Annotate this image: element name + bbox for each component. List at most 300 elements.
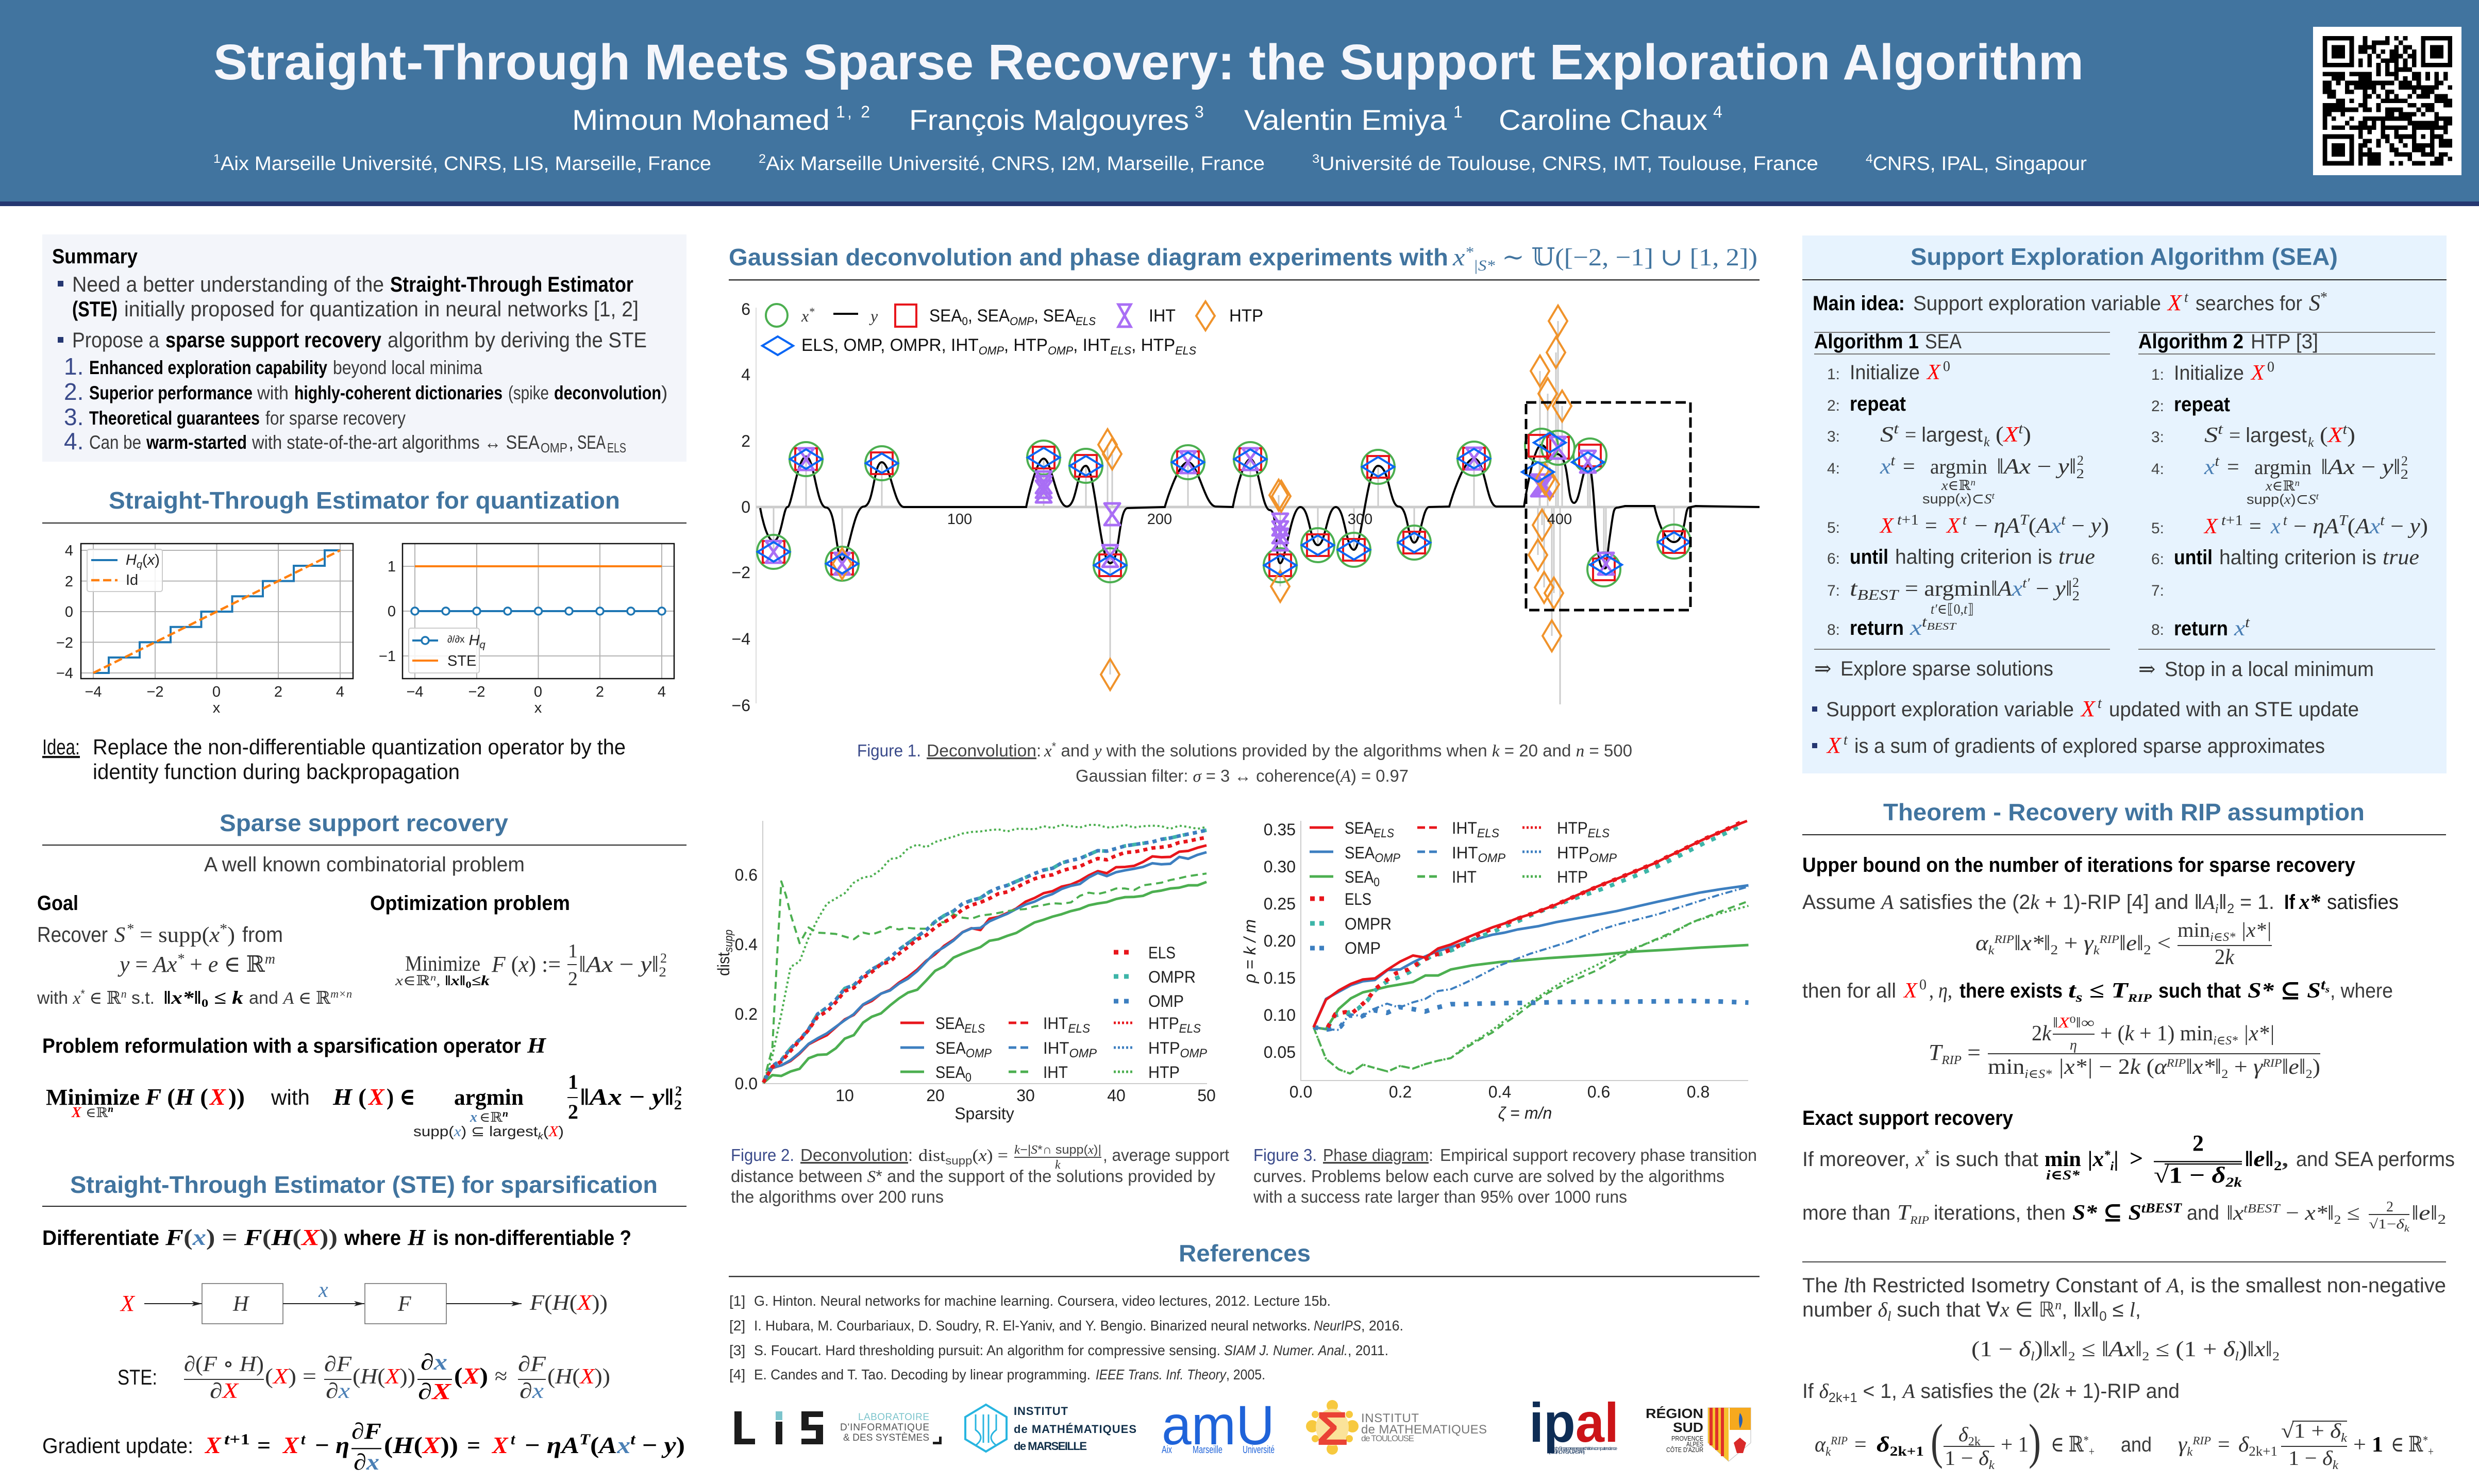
- gradient update formula: t: [301, 1431, 306, 1448]
- summary numbered list: Enhanced exploration capability: [89, 357, 327, 378]
- goal block: n: [121, 987, 127, 1000]
- algorithm 2: HTP: Stop in a local minimum: [2165, 658, 2374, 681]
- logo: Region Sud: SUD: [1673, 1420, 1703, 1435]
- chart legend: OMP: [1048, 344, 1073, 357]
- logo: amU: Université: [1243, 1444, 1275, 1456]
- chart: derivative vs STE: −1: [379, 648, 396, 665]
- figure 2 legend: ELS: [1179, 1022, 1201, 1036]
- upper bound block: ‖x*‖: [2186, 1055, 2221, 1079]
- figure 3 legend: SEA: [1345, 868, 1378, 886]
- chart: figure 2 support distance vs sparsity: [714, 821, 1216, 1123]
- goal block: *: [80, 987, 85, 1000]
- chart: quantization operator Hq vs identity: 2: [274, 684, 282, 700]
- algorithm 1: SEA: 8:: [1827, 621, 1840, 638]
- figure 2 caption: dist: [918, 1146, 945, 1165]
- STE formula: ∂x: [421, 1350, 447, 1375]
- authors: 4: [1713, 103, 1722, 121]
- RIC definition block: 2: [2142, 1350, 2149, 1363]
- algorithm 1: SEA: S: [1880, 423, 1891, 447]
- logo: Institut de Mathematiques de Marseille: de MATHÉMATIQUES: [1014, 1423, 1136, 1436]
- upper bound block: x*: [2299, 890, 2321, 914]
- figure 3 legend: SEA: [1345, 844, 1378, 862]
- figure 3 caption: [1253, 1145, 1757, 1206]
- figure 2 caption: Deconvolution: [800, 1145, 908, 1165]
- figure 3 legend: 0: [1373, 875, 1380, 889]
- algorithm 2: HTP: X: [2203, 515, 2219, 538]
- algorithm 2: HTP: x∈ℝ: [2266, 478, 2294, 494]
- chart legend: *: [809, 305, 814, 318]
- flow diagram: H: [232, 1292, 250, 1316]
- section: theorem recovery with RIP: [1802, 799, 2455, 1472]
- RIC definition block: )‖: [2035, 1338, 2050, 1361]
- upper bound block: RIP: [1941, 1054, 1962, 1067]
- RIC definition block: ≤: [2107, 1298, 2130, 1321]
- chart legend: ELS: [1110, 344, 1131, 357]
- axis labels: [732, 300, 1572, 715]
- STE formula: ∂F: [518, 1353, 546, 1376]
- algorithm 1: SEA: 2: [2072, 575, 2079, 590]
- upper bound block: 2: [2306, 1068, 2313, 1081]
- logo: Institut de Mathematiques de Toulouse: de TOULOUSE: [1361, 1434, 1414, 1443]
- algorithm 2: HTP: S: [2204, 424, 2215, 447]
- figure 3 legend: HTP: [1557, 819, 1590, 837]
- SEA bullets: Support exploration variable: [1826, 698, 2074, 721]
- alpha and gamma constants: δ: [2238, 1433, 2249, 1457]
- algorithm 1: SEA: t: [1894, 421, 1900, 437]
- summary numbered list: SEA: [577, 432, 606, 453]
- algorithm 1: SEA: t: [2061, 512, 2066, 528]
- exact support recovery block: [1802, 1107, 2455, 1234]
- algorithm 1: SEA: X: [1926, 361, 1941, 384]
- figure 2 legend: ELS: [1148, 943, 1176, 962]
- logo: Region Sud: PROVENCE: [1671, 1435, 1703, 1442]
- RIC definition block: x‖: [2050, 1338, 2067, 1361]
- algorithm 1: SEA: =: [1925, 514, 1937, 538]
- goal block: ): [227, 923, 235, 947]
- exact support recovery block: ‖e‖: [2244, 1148, 2269, 1171]
- algorithm 1: SEA: Initialize: [1850, 361, 1920, 384]
- chart legend: OMP: [979, 344, 1004, 357]
- goal block: S: [114, 923, 125, 947]
- figure 3 axis labels: 0.8: [1687, 1083, 1710, 1101]
- exact support recovery block: ‖x: [2226, 1201, 2241, 1224]
- reference list: SIAM J. Numer. Anal.: [1224, 1342, 1348, 1358]
- algorithm 1: SEA: − ηA: [1974, 514, 2017, 538]
- reference list: E. Candes and T. Tao. Decoding by linear programming.: [754, 1367, 1091, 1382]
- figure 1 caption: and: [1056, 741, 1094, 760]
- summary numbered list: ): [661, 382, 667, 403]
- algorithm 2: HTP: t: [2316, 491, 2319, 501]
- algorithm 2: HTP: n: [2295, 478, 2300, 488]
- alpha and gamma constants: +: [2089, 1445, 2095, 1459]
- summary numbered list: Can be: [89, 432, 141, 453]
- figure 3 legend: IHT: [1452, 844, 1479, 862]
- figure 1 caption: [857, 740, 1632, 786]
- summary numbered list: with: [257, 382, 289, 403]
- question: [42, 1225, 631, 1250]
- alpha and gamma constants: 2k+1: [2249, 1444, 2277, 1459]
- problem reformulation: ∈ℝ: [86, 1105, 107, 1120]
- exact support recovery block: is such that: [1930, 1148, 2038, 1171]
- chart: quantization operator Hq vs identity: −4: [85, 684, 102, 700]
- exact support recovery block: If moreover, x: [1802, 1148, 1924, 1171]
- exact support recovery block: T: [1897, 1201, 1909, 1225]
- heading: References: [1179, 1240, 1311, 1267]
- figure 2 axis labels: dist: [714, 950, 733, 976]
- STE formula: (X): [454, 1363, 488, 1389]
- algorithm 2: HTP: HTP [3]: [2251, 330, 2318, 353]
- chart: quantization operator Hq vs identity: [56, 543, 353, 716]
- figure 3 legend: ELS: [1588, 827, 1610, 840]
- affiliations: Université de Toulouse, CNRS, IMT, Toulouse, France: [1319, 153, 1818, 175]
- upper bound block: ‖e‖: [2119, 932, 2143, 955]
- logo: Region Sud: ALPES: [1686, 1440, 1703, 1448]
- figure 1 caption: *: [1052, 740, 1057, 753]
- optimization problem block: ≤k: [472, 973, 490, 988]
- exact support recovery block: RIP: [1909, 1213, 1929, 1226]
- algorithm 2: HTP: halting criterion is: [2219, 546, 2376, 569]
- algorithm 1: SEA: y): [2090, 514, 2108, 538]
- exact support recovery block: 2: [2334, 1213, 2341, 1227]
- figure 3 legend: OMP: [1375, 851, 1400, 865]
- idea text: Replace the non-differentiable quantization operator by the: [93, 735, 626, 759]
- algorithm 1: SEA: Ax: [2036, 514, 2061, 538]
- problem reformulation: F (H (: [145, 1084, 208, 1110]
- problem reformulation: 2: [568, 1100, 578, 1123]
- reference list: [3]: [729, 1342, 745, 1358]
- upper bound block: i∈S*: [2210, 931, 2235, 944]
- algorithm 2: HTP: 5:: [2151, 520, 2164, 537]
- goal block: ∈ ℝ: [85, 989, 121, 1008]
- problem reformulation: X: [209, 1084, 226, 1110]
- STE formula: STE:: [118, 1365, 157, 1389]
- algorithm 2: HTP: − ηA: [2293, 515, 2336, 538]
- figure 2 axis labels: 20: [926, 1086, 945, 1105]
- problem reformulation: X): [548, 1123, 563, 1140]
- RIC definition block: A satisfies the (2k + 1)-RIP and: [1903, 1379, 2182, 1403]
- figure 2 axis labels: 0.4: [735, 935, 758, 954]
- algorithm 1: SEA: Explore sparse solutions: [1840, 657, 2053, 680]
- logo: LIS: & DES SYSTÈMES: [843, 1432, 929, 1443]
- problem reformulation: )): [228, 1084, 245, 1110]
- alpha and gamma constants: γ: [2178, 1433, 2187, 1457]
- chart: derivative vs STE: [379, 544, 674, 716]
- algorithm 2: HTP: return: [2174, 617, 2228, 640]
- upper bound block: 0: [1919, 977, 1927, 993]
- chart: quantization operator Hq vs identity: 0: [212, 684, 221, 700]
- figure 2 legend: IHT: [1043, 1014, 1070, 1033]
- gradient update formula: X: [282, 1432, 299, 1458]
- chart: derivative vs STE: −4: [406, 684, 424, 700]
- optimization problem block: 2: [660, 951, 667, 966]
- algorithm 1: SEA: X: [1946, 514, 1961, 538]
- algorithm 1: SEA: Algorithm 1: [1814, 330, 1919, 353]
- algorithm 2: HTP: t: [2283, 513, 2288, 529]
- figure 3 caption: Figure 3.: [1253, 1145, 1317, 1165]
- upper bound block: |x*|: [2052, 1055, 2093, 1079]
- chart legend: , SEA: [1034, 306, 1076, 326]
- problem reformulation: supp( x) ⊆ largest: [413, 1123, 529, 1140]
- RIC definition block: The lth Restricted Isometry Constant of A, is the smallest non-negative: [1802, 1274, 2446, 1297]
- RIC definition block: < 1,: [1857, 1380, 1903, 1403]
- chart: derivative vs STE: −2: [468, 684, 485, 700]
- authors: Mimoun Mohamed: [572, 104, 830, 136]
- algorithm 2: HTP: 0: [2267, 359, 2274, 375]
- optimization problem block: ‖Ax − y‖: [579, 952, 656, 977]
- exact support recovery block: more than: [1802, 1202, 1890, 1224]
- section: Gaussian deconvolution experiments: [729, 244, 1760, 786]
- algorithm 1: SEA: 7:: [1827, 582, 1840, 599]
- chart legend: x: [801, 307, 809, 325]
- upper bound block: S* ⊆ S: [2248, 979, 2318, 1003]
- summary numbered list: for sparse recovery: [265, 408, 406, 429]
- figure 2 caption: :: [908, 1145, 913, 1165]
- algorithm 2: HTP: x: [2234, 617, 2244, 640]
- figure 2 axis labels: 50: [1197, 1086, 1216, 1105]
- axis labels: 200: [1147, 511, 1172, 528]
- panel: support exploration algorithm: [1802, 235, 2447, 773]
- idea text: [42, 735, 626, 784]
- logo: Region Sud: CÔTE D'AZUR: [1666, 1446, 1703, 1454]
- goal block: +: [184, 952, 203, 977]
- figure 3 legend: HTP: [1557, 868, 1588, 886]
- affiliations: [213, 152, 2087, 175]
- goal block: = supp(x: [140, 923, 219, 947]
- figure 1 caption: x: [1044, 742, 1052, 761]
- figure 3 legend: HTP: [1557, 844, 1590, 862]
- reference list: , 2005.: [1226, 1367, 1265, 1382]
- logo: amU: amU: [1162, 1394, 1275, 1456]
- SEA bullets: X: [1826, 733, 1842, 758]
- upper bound block: s: [2075, 990, 2083, 1005]
- algorithm 1: SEA: BEST: [1857, 587, 1900, 603]
- problem reformulation: 1: [568, 1070, 578, 1093]
- affiliations: 4: [1866, 152, 1873, 166]
- exact support recovery block: and: [2187, 1202, 2219, 1224]
- algorithm 1: SEA: T: [2020, 512, 2030, 528]
- algorithm 1: SEA: return: [1850, 617, 1904, 639]
- chart legend: , SEA: [968, 306, 1010, 326]
- gradient update formula: (H(X)): [384, 1432, 458, 1458]
- algorithm 1: SEA: −: [2030, 577, 2055, 601]
- algorithm 1: SEA: =: [1903, 455, 1915, 479]
- upper bound block: RIP: [2099, 933, 2119, 946]
- figure 2 caption: Figure 2.: [731, 1145, 794, 1165]
- alpha and gamma constants: (: [1931, 1414, 1943, 1469]
- problem reformulation: n: [502, 1108, 508, 1119]
- logo: LIS: [734, 1411, 942, 1444]
- upper bound block: T: [2111, 979, 2124, 1003]
- exact support recovery block: 2k: [2225, 1175, 2242, 1190]
- chart: quantization operator Hq vs identity: Id: [126, 572, 138, 588]
- summary numbered list: with state-of-the-art algorithms ↔ SEA: [252, 432, 540, 453]
- figure 2 legend: SEA: [935, 1039, 968, 1057]
- alpha and gamma constants: 1 − δ: [2288, 1446, 2332, 1470]
- upper bound block: ≤: [2083, 979, 2111, 1003]
- RIC definition block: l: [1887, 1309, 1891, 1324]
- figure 3 axis labels: ρ = k / m: [1241, 919, 1259, 984]
- STE formula: (X) =: [265, 1365, 316, 1389]
- alpha and gamma constants: RIP: [1830, 1434, 1848, 1447]
- optimization problem block: ‖x‖: [445, 973, 465, 988]
- axis labels: 2: [741, 432, 750, 450]
- algorithm 1: SEA: 2: [2076, 466, 2084, 481]
- figure 1 caption: y with the solutions provided by the algorithms when k = 20 and n = 500: [1094, 741, 1632, 761]
- upper bound block: +: [2058, 932, 2084, 955]
- figure 3 axis labels: 0.20: [1264, 932, 1296, 950]
- figure 3 legend: ELS: [1373, 827, 1394, 840]
- RIC definition block: [1802, 1274, 2446, 1405]
- RIC definition block: l: [2235, 1350, 2239, 1363]
- RIC definition block: δ: [2223, 1338, 2236, 1361]
- axis labels: 300: [1348, 511, 1372, 528]
- chart: quantization operator Hq vs identity: 0: [65, 604, 73, 620]
- figure 3 axis labels: 0.10: [1264, 1006, 1296, 1024]
- summary numbered list: ELS: [607, 440, 626, 456]
- section: STE for sparsification: [42, 1171, 686, 1475]
- upper bound block: s: [2325, 984, 2330, 994]
- algorithm 1: SEA: X: [1879, 514, 1895, 538]
- upper bound block: RIP: [2127, 991, 2152, 1004]
- algorithm 2: HTP: [2138, 330, 2435, 681]
- chart: derivative vs STE: 2: [596, 684, 604, 700]
- logo: Institut de Mathematiques de Marseille: [965, 1405, 1136, 1453]
- gradient update formula: y): [663, 1432, 684, 1458]
- chart: deconvolution signal and solutions: [732, 300, 1760, 715]
- exact support recovery block: ≤: [2341, 1201, 2360, 1224]
- STE formula: ∂X: [418, 1379, 452, 1404]
- chart legend: , HTP: [1004, 335, 1048, 355]
- algorithm 2: HTP: 2:: [2151, 398, 2164, 415]
- alpha and gamma constants: =: [1854, 1433, 1867, 1457]
- figure 3 legend: SEA: [1345, 819, 1378, 837]
- figure 3 caption: curves. Problems below each curve are solved by the algorithms: [1253, 1167, 1724, 1186]
- alpha and gamma constants: δ: [1958, 1423, 1968, 1446]
- algorithm 2: HTP: Initialize: [2174, 362, 2244, 384]
- upper bound block: RIP: [2262, 1056, 2282, 1069]
- algorithm 1: SEA: t′∈⟦0,t⟧: [1931, 601, 1974, 617]
- main idea: Main idea:: [1813, 292, 1905, 315]
- authors: François Malgouyres: [909, 104, 1189, 136]
- chart legend: OMP: [1010, 315, 1034, 328]
- algorithm 1: SEA: k: [1984, 434, 1990, 449]
- algorithm 2: HTP: x: [2204, 456, 2214, 479]
- algorithm 2: HTP: −: [2385, 515, 2409, 538]
- alpha and gamma constants: α: [1815, 1433, 1826, 1457]
- goal block: [37, 892, 352, 1009]
- reference list: G. Hinton. Neural networks for machine learning. Coursera, video lectures, 2012. Lecture 15b.: [754, 1293, 1331, 1309]
- exact support recovery block: iterations, then: [1934, 1202, 2066, 1224]
- chart: quantization operator Hq vs identity: H: [126, 552, 137, 568]
- STE formula: ∂x: [520, 1379, 544, 1403]
- authors: 1: [1453, 103, 1463, 121]
- figure 2 caption: k−|S*∩ supp(x)|: [1014, 1143, 1101, 1157]
- flow diagram: F: [397, 1292, 411, 1316]
- figure 2 axis labels: 0.6: [735, 866, 758, 884]
- figure 1 caption: Figure 1.: [857, 741, 921, 760]
- heading: Support Exploration Algorithm (SEA): [1911, 243, 2338, 270]
- chart: quantization operator Hq vs identity: x: [213, 700, 221, 716]
- heading: Sparse support recovery: [220, 810, 508, 836]
- affiliations: Aix Marseille Université, CNRS, LIS, Marseille, France: [221, 153, 711, 175]
- optimization problem block: F (x) :=: [491, 952, 561, 977]
- problem reformulation: x: [470, 1109, 477, 1125]
- chart: quantization operator Hq vs identity: 4: [65, 543, 73, 559]
- summary numbered list: 1.: [64, 353, 83, 380]
- upper bound block: ‖x*‖: [2014, 932, 2051, 955]
- logo: Institut de Mathematiques de Toulouse: de MATHEMATIQUES: [1361, 1423, 1487, 1437]
- axis labels: 4: [741, 365, 750, 384]
- algorithm 2: HTP: ⇒: [2138, 657, 2156, 681]
- logo: IPAL: ipal: [1529, 1391, 1619, 1454]
- algorithm 2: HTP: (: [2348, 515, 2355, 538]
- problem reformulation: X: [71, 1105, 82, 1121]
- panel: summary: [42, 234, 686, 462]
- figure 2 caption: x) =: [979, 1146, 1006, 1165]
- algorithm 2: HTP: 2: [2401, 467, 2408, 482]
- optimization problem block: ,: [436, 973, 445, 988]
- upper bound block: RIP: [2166, 1056, 2186, 1069]
- figure 2 legend: IHT: [1043, 1039, 1070, 1057]
- algorithm 1: SEA: t: [2019, 421, 2024, 437]
- upper bound block: t: [2321, 977, 2326, 993]
- optimization problem block: n: [430, 972, 436, 983]
- optimization problem block: x∈ℝ: [395, 973, 425, 988]
- algorithm 1: SEA: t: [1850, 577, 1856, 601]
- RIC definition block: ≤ (1 +: [2149, 1338, 2223, 1361]
- reference list: [4]: [729, 1367, 745, 1382]
- exact support recovery block: i: [2110, 1160, 2114, 1173]
- chart: quantization operator Hq vs identity: −2: [146, 684, 164, 700]
- upper bound block: i∈S*: [2213, 1034, 2238, 1048]
- upper bound block: γ: [2253, 1055, 2264, 1079]
- RIC definition block: , ‖: [2062, 1298, 2082, 1321]
- logo: amU: Aix: [1162, 1444, 1172, 1456]
- upper bound block: 2k: [2215, 946, 2235, 969]
- affiliations: 3: [1312, 152, 1319, 166]
- logo: Institut de Mathematiques de Marseille: de MARSEILLE: [1014, 1440, 1087, 1453]
- algorithm 1: SEA: (X: [1996, 423, 2017, 447]
- upper bound block: =: [1962, 1040, 1981, 1065]
- RIC definition block: x‖: [2082, 1298, 2099, 1321]
- summary bullets: algorithm by deriving the STE: [388, 328, 647, 352]
- upper bound block: α: [1975, 932, 1987, 955]
- summary numbered list: Theoretical guarantees: [89, 408, 260, 429]
- question: Differentiate: [42, 1226, 159, 1250]
- summary numbered list: highly-coherent dictionaries: [294, 382, 502, 403]
- algorithm 1: SEA: = largest: [1905, 423, 1983, 446]
- figure 3 caption: Empirical support recovery phase transition: [1440, 1145, 1757, 1165]
- figure 1 caption: :: [1036, 741, 1041, 760]
- figure 2 axis labels: 10: [835, 1086, 854, 1105]
- algorithm 1: SEA: = argmin‖ Ax: [1905, 577, 2022, 601]
- flow diagram: X: [120, 1291, 136, 1316]
- reference list: [729, 1293, 1403, 1382]
- logo: Institut de Mathematiques de Toulouse: INSTITUT: [1361, 1411, 1419, 1425]
- figure 3 caption: with a success rate larger than 95% over 1000 runs: [1253, 1187, 1627, 1206]
- algorithm 2: HTP: t: [2245, 615, 2250, 631]
- problem reformulation: [42, 1034, 682, 1141]
- heading: Straight-Through Estimator (STE) for sparsification: [70, 1171, 658, 1198]
- chart legend: , IHT: [1073, 335, 1110, 355]
- upper bound block: there exists: [1959, 980, 2063, 1002]
- summary numbered list: OMP: [541, 440, 567, 456]
- algorithm 1: SEA: t: [1992, 491, 1995, 501]
- figure 3 legend: OMP: [1478, 851, 1505, 865]
- algorithm 2: HTP: 6:: [2151, 551, 2164, 568]
- figure 2 legend: OMP: [1148, 992, 1184, 1010]
- alpha and gamma constants: [1815, 1414, 2434, 1472]
